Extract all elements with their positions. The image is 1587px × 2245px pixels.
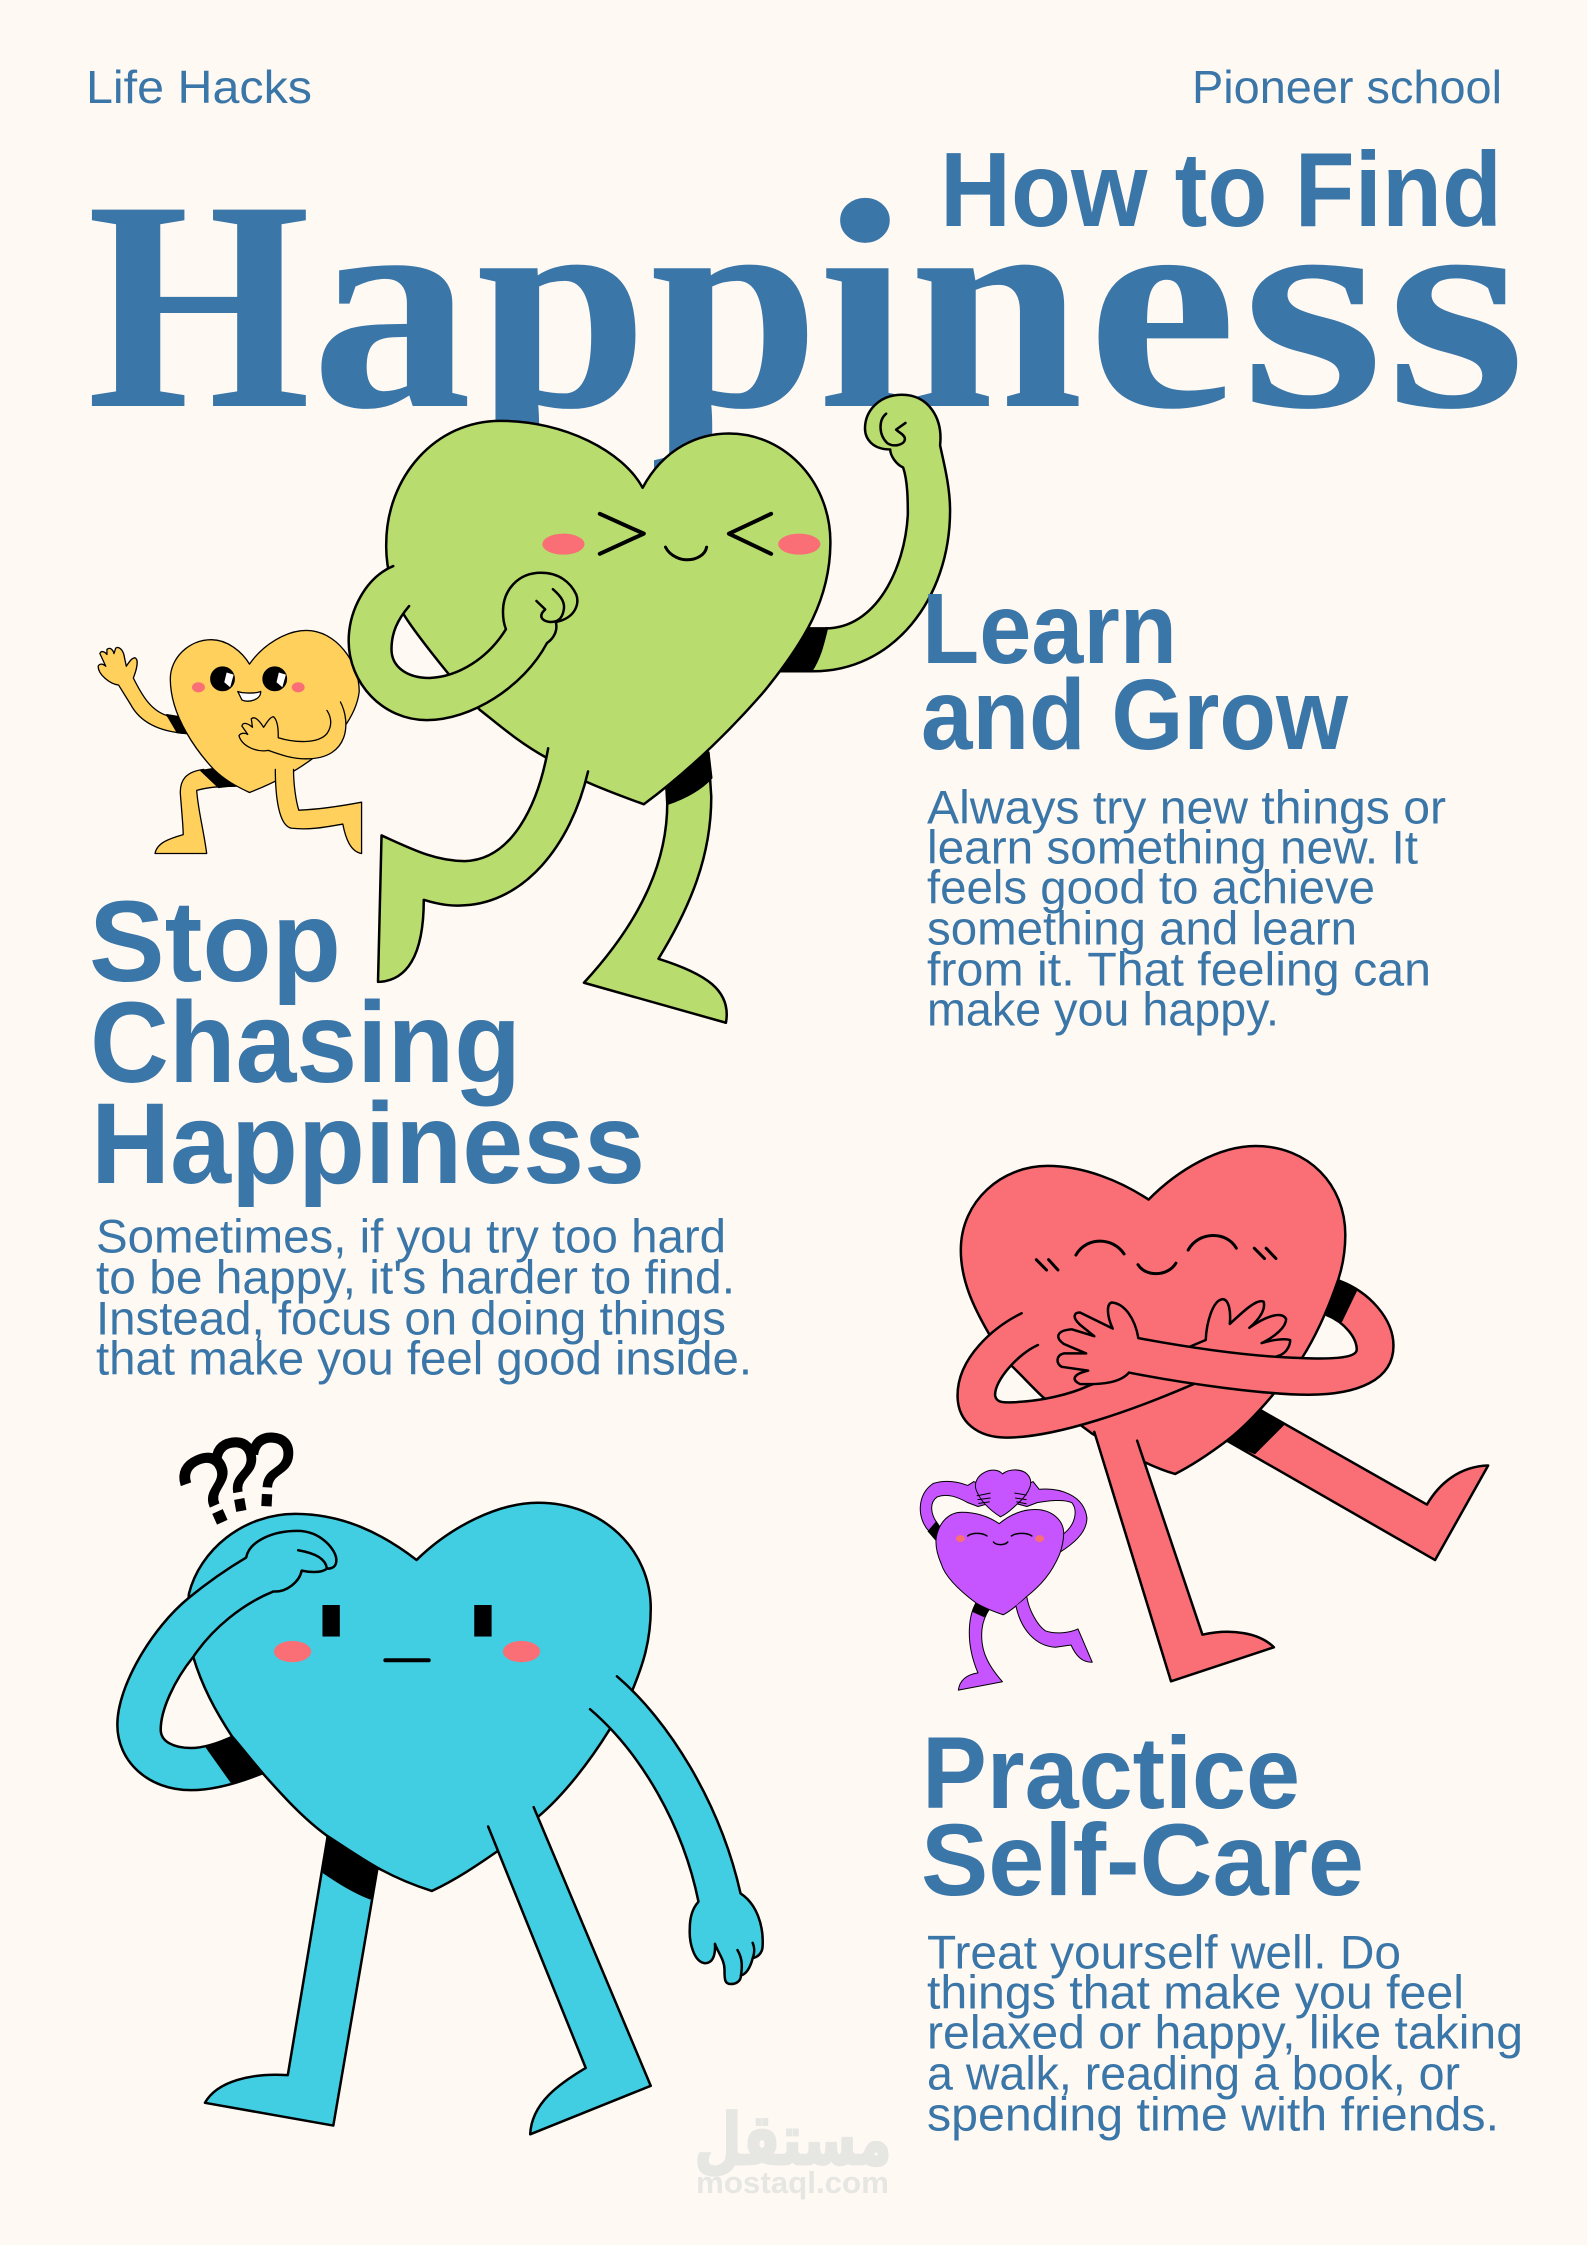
- title: Happiness: e: [1087, 139, 1237, 471]
- purple left arm: [920, 1481, 992, 1531]
- heading: Practice Self-Care: Practice: [922, 1716, 1300, 1830]
- green left cheek: [542, 534, 585, 555]
- blue hanging arm: [590, 1676, 763, 1984]
- blue heart body: [188, 1503, 651, 1891]
- blue left cheek: [274, 1641, 311, 1662]
- red left eye: [1076, 1241, 1124, 1255]
- heading: Stop Chasing Happiness: Happiness: [91, 1080, 645, 1208]
- text block: Stop Chasing Happiness: that make you feel good inside.: [96, 1332, 752, 1384]
- purple heart body: [936, 1510, 1064, 1615]
- heading: Stop Chasing Happiness: Stop: [89, 878, 341, 1006]
- yellow raised arm: [98, 648, 186, 734]
- text block: Learn and Grow: [927, 780, 1446, 1036]
- illustration: purple heart character: [920, 1470, 1092, 1690]
- yellow leg band: [201, 768, 236, 787]
- green leg band: [666, 753, 711, 804]
- text block: Learn and Grow: something and learn: [927, 902, 1357, 954]
- blue fist finger: [298, 1550, 327, 1568]
- header label: Pioneer school: Pioneer school: [1192, 61, 1502, 113]
- purple eyes and mouth: [968, 1533, 1032, 1545]
- title: Happiness: s: [1241, 139, 1384, 471]
- question marks above blue heart: ?: [242, 1411, 298, 1529]
- heading: Learn and Grow: [921, 573, 1348, 771]
- blue leg band: [324, 1836, 378, 1898]
- green bent arm: [349, 566, 577, 720]
- title: Happiness: p: [650, 139, 820, 472]
- red kicked leg: [1227, 1411, 1488, 1560]
- yellow left cheek: [192, 682, 205, 692]
- red right eye: [1188, 1236, 1236, 1250]
- text block: Learn and Grow: Always try new things or: [927, 780, 1446, 834]
- yellow front leg: [275, 769, 362, 854]
- title: Happiness: a: [311, 139, 472, 471]
- heading: Practice Self-Care: [921, 1716, 1364, 1917]
- purple front leg: [1016, 1598, 1092, 1662]
- blue right cheek: [503, 1641, 540, 1662]
- purple small heart held up: [975, 1470, 1031, 1517]
- yellow arm band: [167, 715, 188, 734]
- green left eye: [600, 514, 644, 554]
- title: Happiness: p: [476, 139, 648, 472]
- green arm band: [781, 628, 827, 671]
- purple right cheek: [1035, 1535, 1044, 1542]
- blue arm band: [207, 1737, 263, 1783]
- heading: Learn and Grow: Learn: [922, 573, 1177, 685]
- red heart body: [961, 1146, 1345, 1474]
- yellow heart body: [170, 630, 359, 793]
- illustration: red heart character: [958, 1146, 1488, 1681]
- green fist fingers front: [536, 589, 564, 622]
- purple right arm: [1013, 1482, 1087, 1552]
- text block: Learn and Grow: learn something new. It: [927, 820, 1418, 874]
- text block: Learn and Grow: feels good to achieve: [927, 860, 1375, 914]
- red arm over: [1058, 1281, 1393, 1395]
- text block: Learn and Grow: make you happy.: [927, 982, 1279, 1036]
- blue right eye: [474, 1605, 492, 1637]
- title: Happiness: s: [1386, 139, 1526, 471]
- red arm band: [1327, 1281, 1356, 1321]
- green front leg: [378, 748, 588, 982]
- subtitle: How to Find: How to Find: [940, 131, 1502, 249]
- illustration: yellow heart character: [98, 630, 362, 854]
- question marks above blue heart: ?: [161, 1427, 258, 1552]
- blue mouth: [385, 1658, 429, 1662]
- blue left eye: [322, 1605, 340, 1637]
- red arm under: [958, 1299, 1290, 1438]
- heading: Practice Self-Care: Self-Care: [921, 1803, 1364, 1917]
- yellow right cheek: [292, 682, 305, 692]
- blue arm to head: [117, 1531, 336, 1790]
- blue front leg: [488, 1807, 651, 2134]
- heading: Stop Chasing Happiness: [89, 878, 645, 1208]
- yellow left eye: [211, 667, 234, 691]
- yellow mouth: [238, 691, 261, 701]
- title: Happiness: n: [909, 139, 1083, 471]
- illustration: blue heart character: [117, 1503, 763, 2134]
- green back leg: [584, 753, 727, 1023]
- green mouth: [666, 547, 707, 560]
- purple arm band: [928, 1522, 940, 1542]
- green fist fingers: [881, 414, 905, 445]
- title: Happiness: i: [818, 139, 910, 471]
- text block: Practice Self-Care: relaxed or happy, like taking: [927, 2006, 1523, 2058]
- red blush lines: [1036, 1248, 1276, 1270]
- title: Happiness: H: [87, 139, 311, 471]
- yellow eye highlights: [224, 673, 286, 687]
- text block: Stop Chasing Happiness: Sometimes, if you try too hard: [96, 1210, 726, 1262]
- header label: Life Hacks: Life Hacks: [86, 61, 312, 113]
- purple leg band: [973, 1603, 989, 1617]
- watermark: mostaql: مستقل: [695, 2099, 891, 2181]
- green right cheek: [778, 534, 820, 555]
- red leg band: [1227, 1411, 1283, 1453]
- text block: Practice Self-Care: things that make you feel: [927, 1966, 1464, 2018]
- purple hand fingers: [977, 1493, 1026, 1504]
- illustration: green heart character: [349, 395, 950, 1023]
- green raised arm: [811, 395, 950, 671]
- purple back leg: [958, 1603, 1002, 1690]
- text block: Practice Self-Care: a walk, reading a book, or: [927, 2046, 1460, 2100]
- yellow right eye: [263, 667, 286, 691]
- yellow back leg: [155, 769, 236, 854]
- green right eye: [729, 514, 771, 554]
- heading: Learn and Grow: and Grow: [921, 659, 1348, 771]
- text block: Practice Self-Care: [927, 1926, 1523, 2140]
- text block: Learn and Grow: from it. That feeling can: [927, 942, 1431, 996]
- text block: Stop Chasing Happiness: [96, 1210, 752, 1384]
- question marks above blue heart: ?: [202, 1414, 271, 1536]
- yellow arm across chest: [239, 702, 346, 759]
- text block: Stop Chasing Happiness: to be happy, it's harder to find.: [96, 1250, 735, 1304]
- text block: Practice Self-Care: spending time with friends.: [927, 2088, 1499, 2140]
- red mouth: [1138, 1263, 1176, 1274]
- green heart body: [386, 421, 830, 804]
- text block: Stop Chasing Happiness: Instead, focus on doing things: [96, 1292, 726, 1344]
- question marks above blue heart: [161, 1411, 298, 1552]
- watermark: mostaql: mostaql.com: [696, 2165, 889, 2200]
- blue back leg: [205, 1836, 378, 2126]
- purple left cheek: [956, 1535, 965, 1542]
- text block: Practice Self-Care: Treat yourself well. Do: [927, 1926, 1401, 1978]
- heading: Stop Chasing Happiness: Chasing: [90, 979, 521, 1107]
- blue hand fingers: [737, 1943, 754, 1975]
- red front leg: [1094, 1432, 1274, 1681]
